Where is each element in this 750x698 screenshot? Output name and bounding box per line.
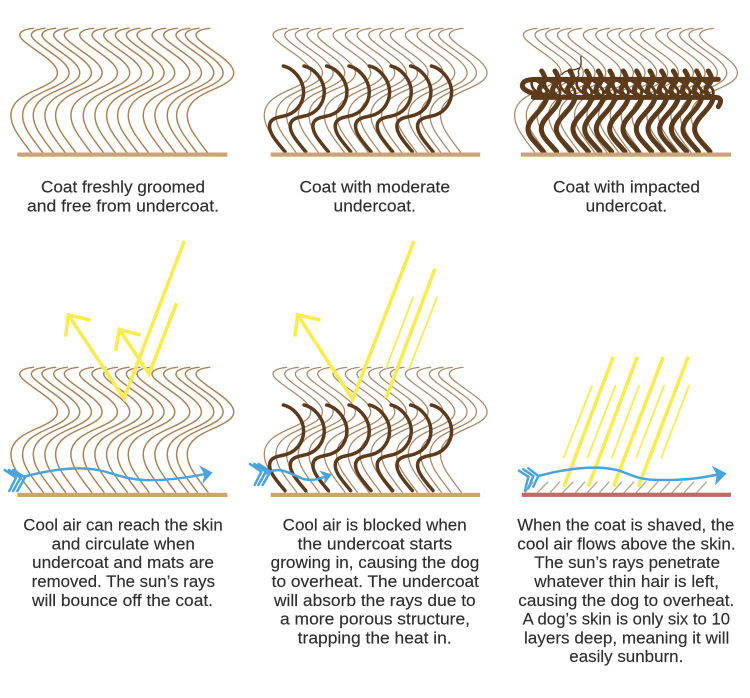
skin base: [17, 493, 227, 497]
air flow arrow: [5, 465, 213, 491]
description: Cool air can reach the skin: [23, 517, 223, 535]
description: will bounce off the coat.: [31, 592, 213, 610]
short hair stubble: [525, 482, 707, 493]
description: the undercoat starts: [298, 535, 452, 553]
sun rays bouncing off: [66, 241, 184, 398]
blocked air flow arrow: [250, 464, 332, 485]
description: Cool air is blocked when: [283, 517, 467, 535]
panel: moderate undercoat with air and sun: [250, 241, 487, 648]
description: layers deep, meaning it will: [524, 630, 729, 648]
description: [271, 517, 479, 648]
description: [23, 517, 223, 610]
skin base: [271, 152, 480, 157]
caption: Coat with impacted: [553, 179, 700, 197]
description: The sun’s rays penetrate: [534, 554, 720, 572]
caption: [553, 179, 700, 216]
description: [517, 517, 736, 666]
description: undercoat and mats are: [32, 554, 214, 572]
description: and circulate when: [52, 535, 195, 553]
description: When the coat is shaved, the: [517, 517, 734, 535]
panel: coat with moderate undercoat: [264, 28, 487, 216]
skin base: [521, 152, 731, 157]
panel: groomed coat with air and sun: [5, 241, 234, 610]
skin base: [17, 152, 227, 157]
description: to overheat. The undercoat: [272, 573, 479, 591]
panel: coat with impacted undercoat: [515, 28, 737, 216]
description: A dog’s skin is only six to 10: [523, 611, 730, 629]
hair strands: [11, 367, 234, 492]
skin: [522, 493, 731, 497]
description: will absorb the rays due to: [273, 592, 476, 610]
panel: coat freshly groomed: [11, 28, 234, 216]
description: cool air flows above the skin.: [517, 535, 736, 553]
caption: undercoat.: [586, 198, 667, 216]
sun rays absorbed: [295, 241, 437, 399]
skin base: [271, 493, 480, 497]
sun rays penetrating: [563, 357, 689, 487]
hair with undercoat: [264, 367, 487, 492]
description: causing the dog to overheat.: [518, 592, 734, 610]
hair strands: [11, 28, 234, 153]
description: easily sunburn.: [569, 648, 683, 666]
caption: [300, 179, 450, 216]
hair with impacted undercoat: [515, 28, 737, 153]
panel: shaved coat with air and sun: [517, 357, 736, 666]
hair with undercoat: [264, 28, 487, 153]
description: whatever thin hair is left,: [533, 573, 719, 591]
caption: Coat with moderate: [300, 179, 450, 197]
caption: undercoat.: [334, 198, 416, 216]
description: growing in, causing the dog: [271, 554, 479, 572]
caption: [27, 179, 219, 216]
description: trapping the heat in.: [298, 630, 452, 648]
description: removed. The sun’s rays: [32, 573, 215, 591]
caption: and free from undercoat.: [27, 198, 219, 216]
caption: Coat freshly groomed: [41, 179, 205, 197]
description: a more porous structure,: [280, 611, 470, 629]
air flow arrow: [519, 466, 727, 491]
